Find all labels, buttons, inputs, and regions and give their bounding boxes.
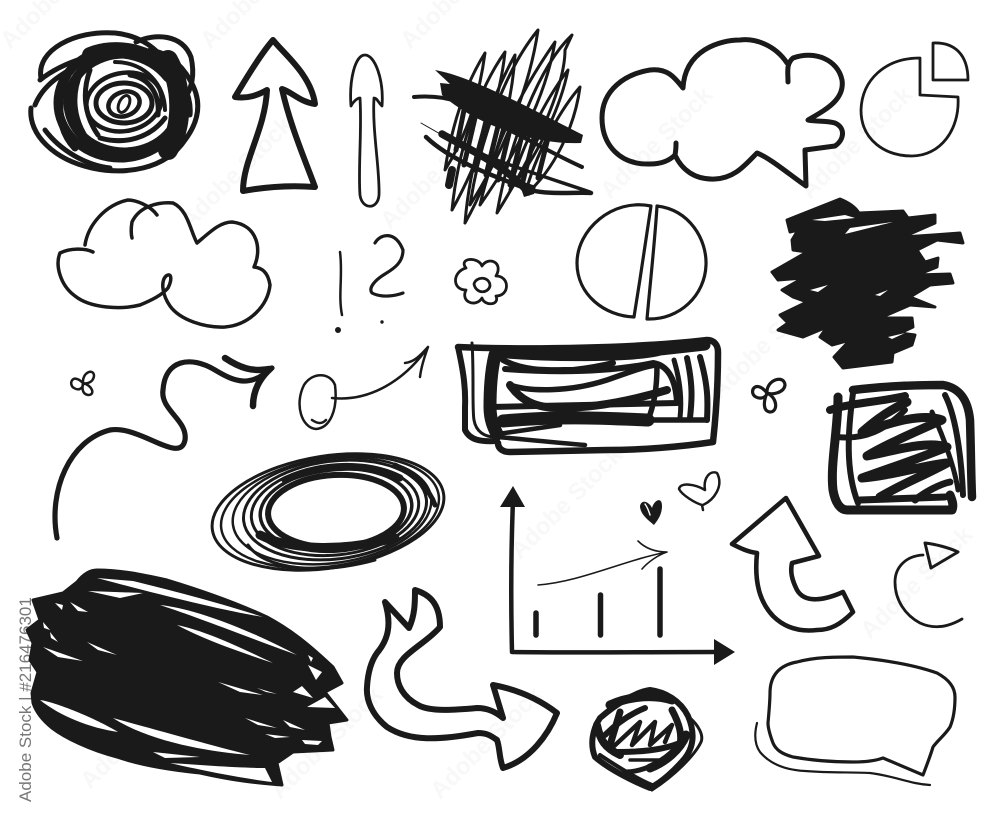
scribble: square bbox=[830, 385, 972, 510]
watermark pattern: Adobe Stock bbox=[175, 111, 298, 234]
watermark pattern: Adobe Stock bbox=[705, 281, 828, 404]
watermark pattern: Adobe Stock bbox=[375, 111, 498, 234]
scribble: rectangle spiral bbox=[458, 340, 718, 452]
speech bubble bottom right bbox=[755, 657, 955, 785]
chart trend arrow bbox=[538, 541, 667, 585]
chart axes bbox=[500, 486, 735, 665]
icon: pie chart top right bbox=[861, 43, 968, 156]
arrow: large curved right bbox=[367, 590, 557, 768]
arrow: circle with thin arrow bbox=[300, 347, 428, 429]
watermark pattern: Adobe Stock bbox=[425, 681, 548, 804]
arrow: large outlined up arrow bbox=[235, 40, 315, 191]
watermark pattern: Adobe Stock bbox=[795, 81, 918, 204]
watermark pattern: Adobe Stock bbox=[855, 521, 978, 644]
icon: pie arc with arrow bbox=[895, 543, 962, 627]
watermark pattern: Adobe Stock bbox=[505, 441, 628, 564]
scribble: small knot bbox=[592, 690, 702, 790]
scribble: large solid oval bbox=[27, 570, 347, 785]
watermark pattern: Adobe Stock bbox=[265, 681, 388, 804]
icon: split circle bbox=[577, 205, 706, 319]
arrow: curved return bbox=[732, 498, 853, 630]
chart bars bbox=[536, 569, 660, 635]
icon: small clover right bbox=[753, 379, 785, 412]
watermark pattern: Adobe Stock bbox=[75, 671, 198, 794]
question mark bbox=[371, 236, 403, 324]
watermark pattern: Adobe Stock bbox=[595, 81, 718, 204]
icon: small clover left bbox=[71, 372, 94, 395]
arrow: wavy bbox=[55, 358, 272, 538]
icon: flower bbox=[456, 259, 506, 304]
scribble: cross hatch bbox=[414, 30, 591, 223]
scribble: oval ring bbox=[204, 438, 452, 586]
icon: outline heart bbox=[679, 472, 719, 510]
icon: solid heart bbox=[640, 500, 662, 525]
scribble: solid black right bbox=[772, 199, 963, 368]
cloud outline bbox=[58, 200, 270, 327]
chart: rising bars with axes bbox=[500, 486, 735, 665]
speech cloud top bbox=[602, 40, 843, 186]
side credit text: Adobe Stock | #216476301 bbox=[16, 597, 35, 802]
exclamation mark bbox=[335, 252, 342, 333]
scribble: round tangle top left bbox=[31, 33, 198, 171]
arrow: narrow up arrow bbox=[351, 55, 382, 206]
